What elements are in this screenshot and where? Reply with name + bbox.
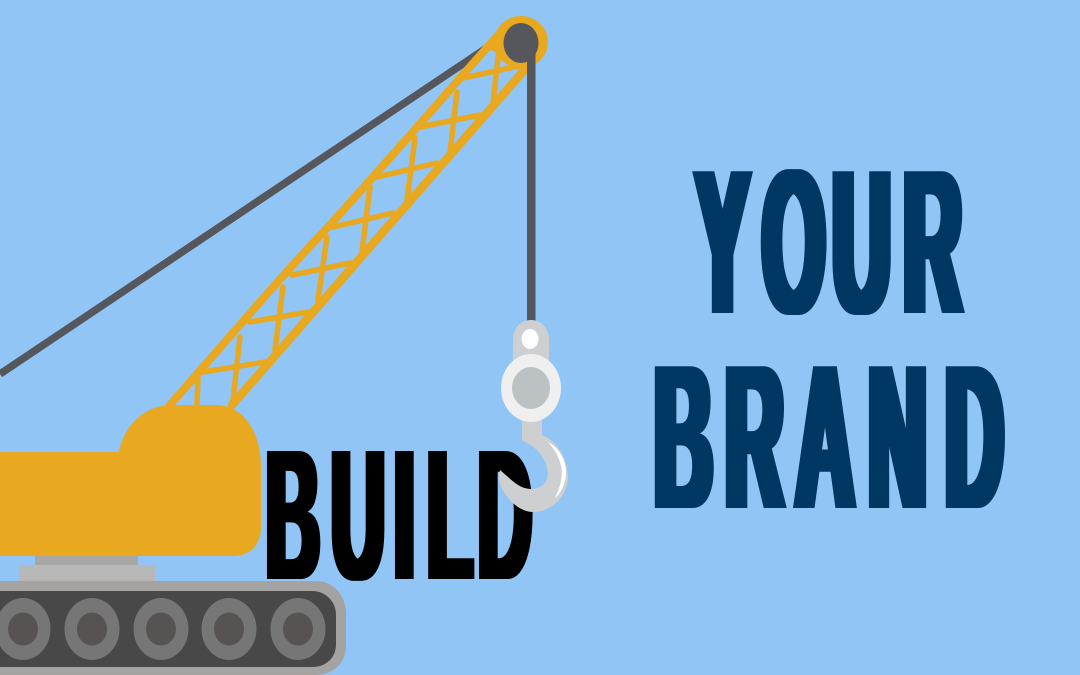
track wheels [0,598,326,660]
hook highlight [548,442,566,498]
hoist cable [527,50,536,322]
cab and body [0,405,261,556]
hook [499,420,568,512]
crane boom lattice [170,33,527,405]
icon: hook block [499,320,568,512]
heading: BRAND: BRAND [654,322,1003,553]
support cable [0,41,497,374]
heading: BUILD: BUILD [266,412,532,620]
icon: crane [0,16,548,675]
turntable base [19,556,155,582]
heading: YOUR: YOUR [696,127,962,358]
caterpillar track [0,581,346,675]
boom head pulley [487,16,548,68]
